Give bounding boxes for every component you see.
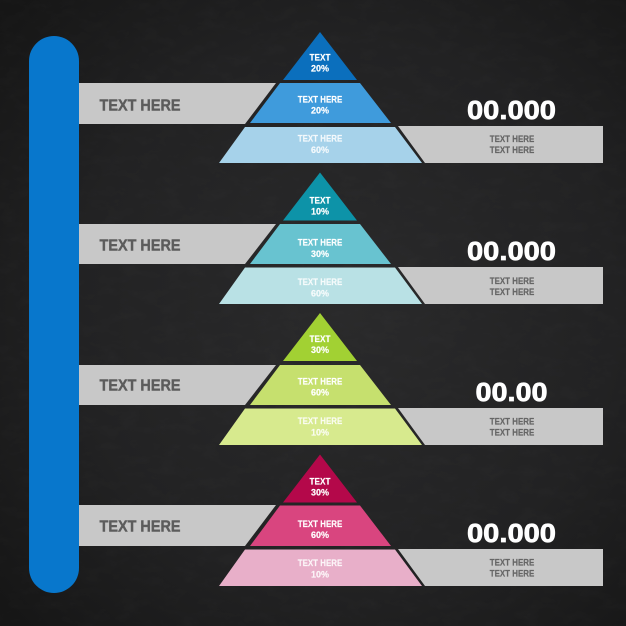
pyramid 2: 60% xyxy=(311,288,329,298)
right info band 2 xyxy=(398,267,603,304)
right info band 4: TEXT HERE xyxy=(490,558,534,568)
right info band 3 xyxy=(398,408,603,445)
right info band 1: TEXT HERE xyxy=(490,134,534,144)
pyramid 2: TEXT xyxy=(310,196,331,206)
pyramid 2: 30% xyxy=(311,249,329,259)
pyramid 1: 20% xyxy=(311,106,329,116)
right info band 3: TEXT HERE xyxy=(490,416,534,426)
right info band 4 xyxy=(398,549,603,586)
pyramid 2: TEXT HERE xyxy=(298,238,342,248)
left label band 1: TEXT HERE xyxy=(100,98,181,114)
left label band 1 xyxy=(79,83,276,124)
left label band 4: TEXT HERE xyxy=(100,518,181,536)
pyramid 1 xyxy=(219,32,422,163)
pyramid 2 xyxy=(219,172,422,304)
left label band 4 xyxy=(79,505,276,546)
panel: section 2 xyxy=(79,172,603,304)
pyramid 1: TEXT xyxy=(310,52,331,62)
pyramid 3: 10% xyxy=(311,428,329,438)
pyramid 3: 60% xyxy=(311,388,329,398)
panel: section 3 xyxy=(79,313,603,445)
value 1: 00.000 xyxy=(467,95,556,125)
right info band 4: TEXT HERE xyxy=(490,568,534,578)
right info band 1: TEXT HERE xyxy=(490,145,534,155)
pyramid 1: TEXT HERE xyxy=(298,134,342,144)
left label band 2: TEXT HERE xyxy=(100,238,181,254)
pyramid 2: 10% xyxy=(311,206,329,216)
pyramid 3: TEXT HERE xyxy=(298,376,342,386)
pyramid 1: 20% xyxy=(311,64,329,74)
pyramid 4: TEXT xyxy=(310,476,331,486)
pyramid 4: 30% xyxy=(311,488,329,498)
value 2: 00.000 xyxy=(467,236,556,266)
value 4: 00.000 xyxy=(467,518,556,548)
pyramid 4: 60% xyxy=(311,530,329,540)
pyramid 4: TEXT HERE xyxy=(298,558,342,568)
value 3: 00.00 xyxy=(476,377,548,407)
pyramid 4 xyxy=(219,454,422,586)
right info band 1 xyxy=(398,126,603,163)
left label band 3 xyxy=(79,365,276,405)
pyramid 1: TEXT HERE xyxy=(298,94,342,104)
right info band 3: TEXT HERE xyxy=(490,428,534,438)
right info band 2: TEXT HERE xyxy=(490,287,534,297)
pyramid 3: TEXT xyxy=(310,334,331,344)
pyramid 3 xyxy=(219,313,422,445)
right info band 2: TEXT HERE xyxy=(490,276,534,286)
pyramid 1: 60% xyxy=(311,145,329,155)
pyramid 4: TEXT HERE xyxy=(298,519,342,529)
pyramid 4: 10% xyxy=(311,570,329,580)
panel: section 1 xyxy=(79,32,603,163)
pyramid 3: TEXT HERE xyxy=(298,416,342,426)
left label band 3: TEXT HERE xyxy=(100,378,181,394)
vertical blue bar xyxy=(29,36,79,593)
left label band 2 xyxy=(79,224,276,264)
pyramid 2: TEXT HERE xyxy=(298,277,342,287)
panel: section 4 xyxy=(79,454,603,586)
pyramid 3: 30% xyxy=(311,345,329,355)
